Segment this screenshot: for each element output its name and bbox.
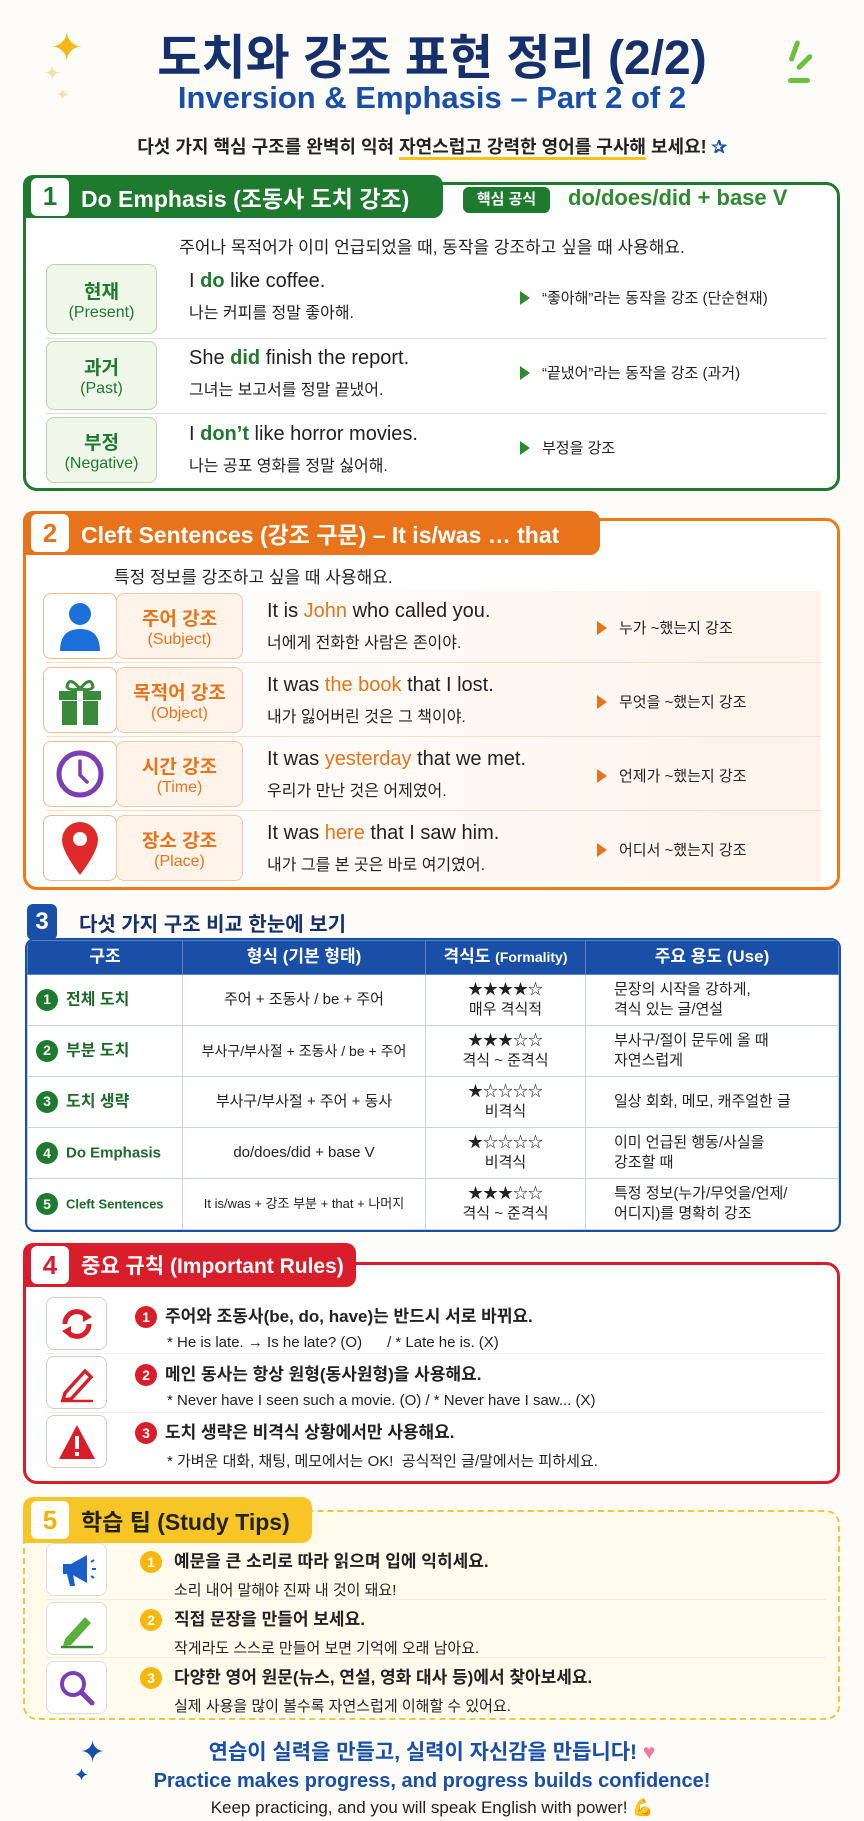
table: comparison: 비격식 <box>485 1154 526 1171</box>
rule 1: 1 <box>142 1309 150 1325</box>
table: comparison: 4 <box>43 1145 51 1161</box>
icon: megaphone <box>46 1543 107 1596</box>
section 4 header <box>23 1243 356 1287</box>
section 4 header: 중요 규칙 (Important Rules) <box>81 1255 344 1278</box>
sentence: negative: 나는 공포 영화를 정말 싫어해. <box>189 458 388 475</box>
section 1 header: 1 <box>43 181 57 211</box>
table: comparison: 형식 (기본 형태) <box>247 947 361 966</box>
footer message: Keep practicing, and you will speak English with power! 💪 <box>211 1798 653 1817</box>
icon: green pencil <box>46 1602 107 1655</box>
label: present: 현재 <box>84 282 119 302</box>
section 1 header <box>23 175 443 218</box>
icon: refresh <box>46 1297 107 1350</box>
rule 1 <box>135 1306 533 1351</box>
tip 3: 다양한 영어 원문(뉴스, 연설, 영화 대사 등)에서 찾아보세요. <box>174 1668 592 1687</box>
section 5 header: 학습 팁 (Study Tips) <box>81 1509 290 1535</box>
tagline: 다섯 가지 핵심 구조를 완벽히 익혀 자연스럽고 강력한 영어를 구사해 보세요! ✰ <box>137 137 727 157</box>
section 2 header: 2 <box>43 518 57 548</box>
sentence: present: I do like coffee. <box>189 270 325 292</box>
table: comparison: 도치 생략 <box>66 1093 129 1110</box>
sentence: object <box>267 674 494 726</box>
table: comparison: Do Emphasis <box>66 1145 161 1162</box>
label: object: (Object) <box>151 704 208 722</box>
label: past <box>46 341 157 410</box>
table: comparison: Cleft Sentences <box>66 1197 164 1212</box>
label: object: 목적어 강조 <box>133 682 226 704</box>
subtitle: Inversion & Emphasis – Part 2 of 2 <box>178 80 686 115</box>
icon: blue sparkles <box>74 1736 105 1785</box>
sentence: place: 내가 그를 본 곳은 바로 여기였어. <box>267 857 485 874</box>
table: comparison: do/does/did + base V <box>233 1144 375 1161</box>
sentence: subject: It is John who called you. <box>267 600 490 622</box>
rule 3: 도치 생략은 비격식 상황에서만 사용해요. <box>165 1423 454 1442</box>
label: time <box>116 741 243 807</box>
table: comparison: ★☆☆☆☆ <box>468 1083 543 1100</box>
table: comparison: 3 <box>43 1093 51 1109</box>
table: comparison: 격식 있는 글/연설 <box>614 1001 723 1018</box>
section 1 description: 주어나 목적어가 이미 언급되었을 때, 동작을 강조하고 싶을 때 사용해요. <box>179 238 685 257</box>
label: time: 시간 강조 <box>142 756 217 778</box>
table: comparison: 구조 <box>89 947 121 966</box>
rule 3 <box>135 1422 598 1470</box>
table: comparison: 부사구/부사절 + 조동사 / be + 주어 <box>202 1043 406 1059</box>
table: comparison: 특정 정보(누가/무엇을/언제/ <box>614 1185 787 1202</box>
label: place: 장소 강조 <box>142 830 217 852</box>
section 4 header: 4 <box>43 1250 57 1280</box>
icon: pencil <box>46 1356 107 1409</box>
table: comparison: 어디지)를 명확히 강조 <box>614 1205 752 1222</box>
sentence: subject <box>267 600 490 652</box>
sentence: object: 내가 잃어버린 것은 그 책이야. <box>267 709 466 726</box>
sentence: negative <box>189 423 418 475</box>
sentence: place <box>267 822 499 874</box>
label: present <box>46 264 157 334</box>
rule 1: 주어와 조동사(be, do, have)는 반드시 서로 바뀌요. <box>165 1307 533 1326</box>
note: past: “끝냈어”라는 동작을 강조 (과거) <box>542 365 740 382</box>
tip 2: 직접 문장을 만들어 보세요. <box>174 1610 365 1629</box>
sentence: time: 우리가 만난 것은 어제였어. <box>267 783 447 800</box>
table: comparison: 전체 도치 <box>66 991 129 1008</box>
table: comparison: 일상 회화, 메모, 캐주얼한 글 <box>614 1093 791 1110</box>
rule 2: * Never have I seen such a movie. (O) / * Never have I saw... (X) <box>167 1392 596 1409</box>
tip 1 <box>140 1551 489 1599</box>
text: ✦ <box>44 63 61 85</box>
rule 2 <box>135 1364 596 1409</box>
section 3 heading <box>27 904 346 940</box>
footer message <box>154 1741 710 1817</box>
tip 1: 1 <box>147 1554 155 1570</box>
table: comparison: 5 <box>43 1196 51 1212</box>
panel: study tips <box>23 1510 840 1720</box>
tip 1: 소리 내어 말해야 진짜 내 것이 돼요! <box>174 1582 396 1599</box>
sentence: present: 나는 커피를 정말 좋아해. <box>189 305 354 322</box>
sentence: time <box>267 748 526 800</box>
sentence: place: It was here that I saw him. <box>267 822 499 844</box>
sentence: past: 그녀는 보고서를 정말 끝냈어. <box>189 382 383 399</box>
rule 3: 3 <box>142 1425 150 1441</box>
tip 3 <box>140 1667 592 1715</box>
label: negative: 부정 <box>84 432 119 454</box>
note: place: 어디서 ~했는지 강조 <box>619 842 746 859</box>
label: subject: 주어 강조 <box>142 608 217 630</box>
table: comparison: 자연스럽게 <box>614 1052 683 1069</box>
label: place: (Place) <box>154 852 205 870</box>
label: negative: (Negative) <box>65 454 138 472</box>
label: object <box>116 667 243 733</box>
section 2 description: 특정 정보를 강조하고 싶을 때 사용해요. <box>114 568 393 587</box>
rule 3: * 가벼운 대화, 채팅, 메모에서는 OK! 공식적인 글/말에서는 피하세요. <box>167 1453 598 1470</box>
note: negative: 부정을 강조 <box>542 440 615 457</box>
panel: do emphasis <box>23 182 840 491</box>
icon: person <box>43 593 117 659</box>
rule 2: 2 <box>142 1367 150 1383</box>
table: comparison: 부사구/부사절 + 주어 + 동사 <box>216 1093 392 1110</box>
table: comparison: 강조할 때 <box>614 1154 673 1171</box>
label: present: (Present) <box>69 304 134 320</box>
icon: sparkles: ✦ <box>50 26 84 70</box>
section 3 heading: 다섯 가지 구조 비교 한눈에 보기 <box>79 914 346 936</box>
icon: gift <box>43 667 117 733</box>
label: past: 과거 <box>84 358 119 379</box>
title: 도치와 강조 표현 정리 (2/2) <box>157 32 707 85</box>
label: negative <box>46 417 157 483</box>
note: time: 언제가 ~했는지 강조 <box>619 768 746 785</box>
sentence: negative: I don’t like horror movies. <box>189 423 418 445</box>
sentence: subject: 너에게 전화한 사람은 존이야. <box>267 635 461 652</box>
label: subject <box>116 593 243 659</box>
table: comparison: 부분 도치 <box>66 1042 129 1059</box>
icon: magnifier <box>46 1661 107 1714</box>
sentence: past: She did finish the report. <box>189 347 409 369</box>
icon: green dashes <box>788 40 812 83</box>
table: comparison: It is/was + 강조 부분 + that + 나머지 <box>204 1196 404 1211</box>
tip 3: 3 <box>147 1670 155 1686</box>
section 3 heading: 3 <box>35 908 49 935</box>
rule 2: 메인 동사는 항상 원형(동사원형)을 사용해요. <box>165 1365 481 1384</box>
table: comparison: 격식 ~ 준격식 <box>462 1205 549 1222</box>
icon: blue sparkles: ✦ <box>80 1736 105 1769</box>
icon: warning <box>46 1415 107 1468</box>
section 2 header <box>23 511 600 555</box>
icon: sparkles <box>44 26 84 104</box>
table: comparison <box>25 938 841 1232</box>
formula pill: 핵심 공식 <box>477 191 536 208</box>
table: comparison: 주요 용도 (Use) <box>655 947 769 966</box>
section 5 header <box>23 1497 312 1543</box>
label: place <box>116 815 243 881</box>
tip 3: 실제 사용을 많이 볼수록 자연스럽게 이해할 수 있어요. <box>174 1698 511 1715</box>
table: comparison: ★☆☆☆☆ <box>468 1134 543 1151</box>
footer message: Practice makes progress, and progress builds confidence! <box>154 1770 710 1792</box>
table: comparison: ★★★★☆ <box>468 981 543 998</box>
sentence: past <box>189 347 409 399</box>
label: subject: (Subject) <box>147 630 212 648</box>
table: comparison: ★★★☆☆ <box>468 1185 543 1202</box>
tip 2: 2 <box>147 1612 155 1628</box>
rule 1: * He is late. → Is he late? (O) / * Late he is. (X) <box>167 1334 499 1351</box>
label: past: (Past) <box>80 380 123 397</box>
note: present: “좋아해”라는 동작을 강조 (단순현재) <box>542 290 768 307</box>
text: ✦ <box>56 87 69 104</box>
section 2 header: Cleft Sentences (강조 구문) – It is/was … that <box>81 522 559 548</box>
footer message: 연습이 실력을 만들고, 실력이 자신감을 만듭니다! ♥ <box>209 1741 655 1764</box>
icon: clock <box>43 741 117 807</box>
note: subject: 누가 ~했는지 강조 <box>619 620 733 637</box>
label: time: (Time) <box>157 778 202 796</box>
sentence: time: It was yesterday that we met. <box>267 748 526 770</box>
table: comparison: 부사구/절이 문두에 올 때 <box>614 1032 769 1049</box>
table: comparison: 매우 격식적 <box>469 1001 542 1018</box>
table: comparison: 2 <box>43 1042 51 1058</box>
sentence: present <box>189 270 354 322</box>
note: object: 무엇을 ~했는지 강조 <box>619 694 746 711</box>
panel: cleft sentences <box>23 518 840 890</box>
text: ✦ <box>74 1765 89 1785</box>
section 5 header: 5 <box>43 1504 57 1534</box>
table: comparison: 비격식 <box>485 1103 526 1120</box>
tip 1: 예문을 큰 소리로 따라 읽으며 입에 익히세요. <box>174 1552 489 1571</box>
table: comparison: 격식도 (Formality) <box>444 947 568 966</box>
table: comparison: 주어 + 조동사 / be + 주어 <box>224 991 384 1008</box>
formula: do/does/did + base V <box>568 185 787 210</box>
tip 2 <box>140 1609 479 1657</box>
table: comparison: 1 <box>43 991 51 1007</box>
table: comparison: ★★★☆☆ <box>468 1032 543 1049</box>
table: comparison: 격식 ~ 준격식 <box>462 1052 549 1069</box>
section 1 header: Do Emphasis (조동사 도치 강조) <box>81 186 409 212</box>
table: comparison: 문장의 시작을 강하게, <box>614 981 751 998</box>
tip 2: 작게라도 스스로 만들어 보면 기억에 오래 남아요. <box>174 1640 479 1657</box>
table: comparison: 이미 언급된 행동/사실을 <box>614 1134 765 1151</box>
formula pill <box>463 187 550 213</box>
sentence: object: It was the book that I lost. <box>267 674 494 696</box>
row backgrounds <box>43 591 821 881</box>
panel: important rules <box>23 1262 840 1484</box>
icon: pin <box>43 815 117 881</box>
